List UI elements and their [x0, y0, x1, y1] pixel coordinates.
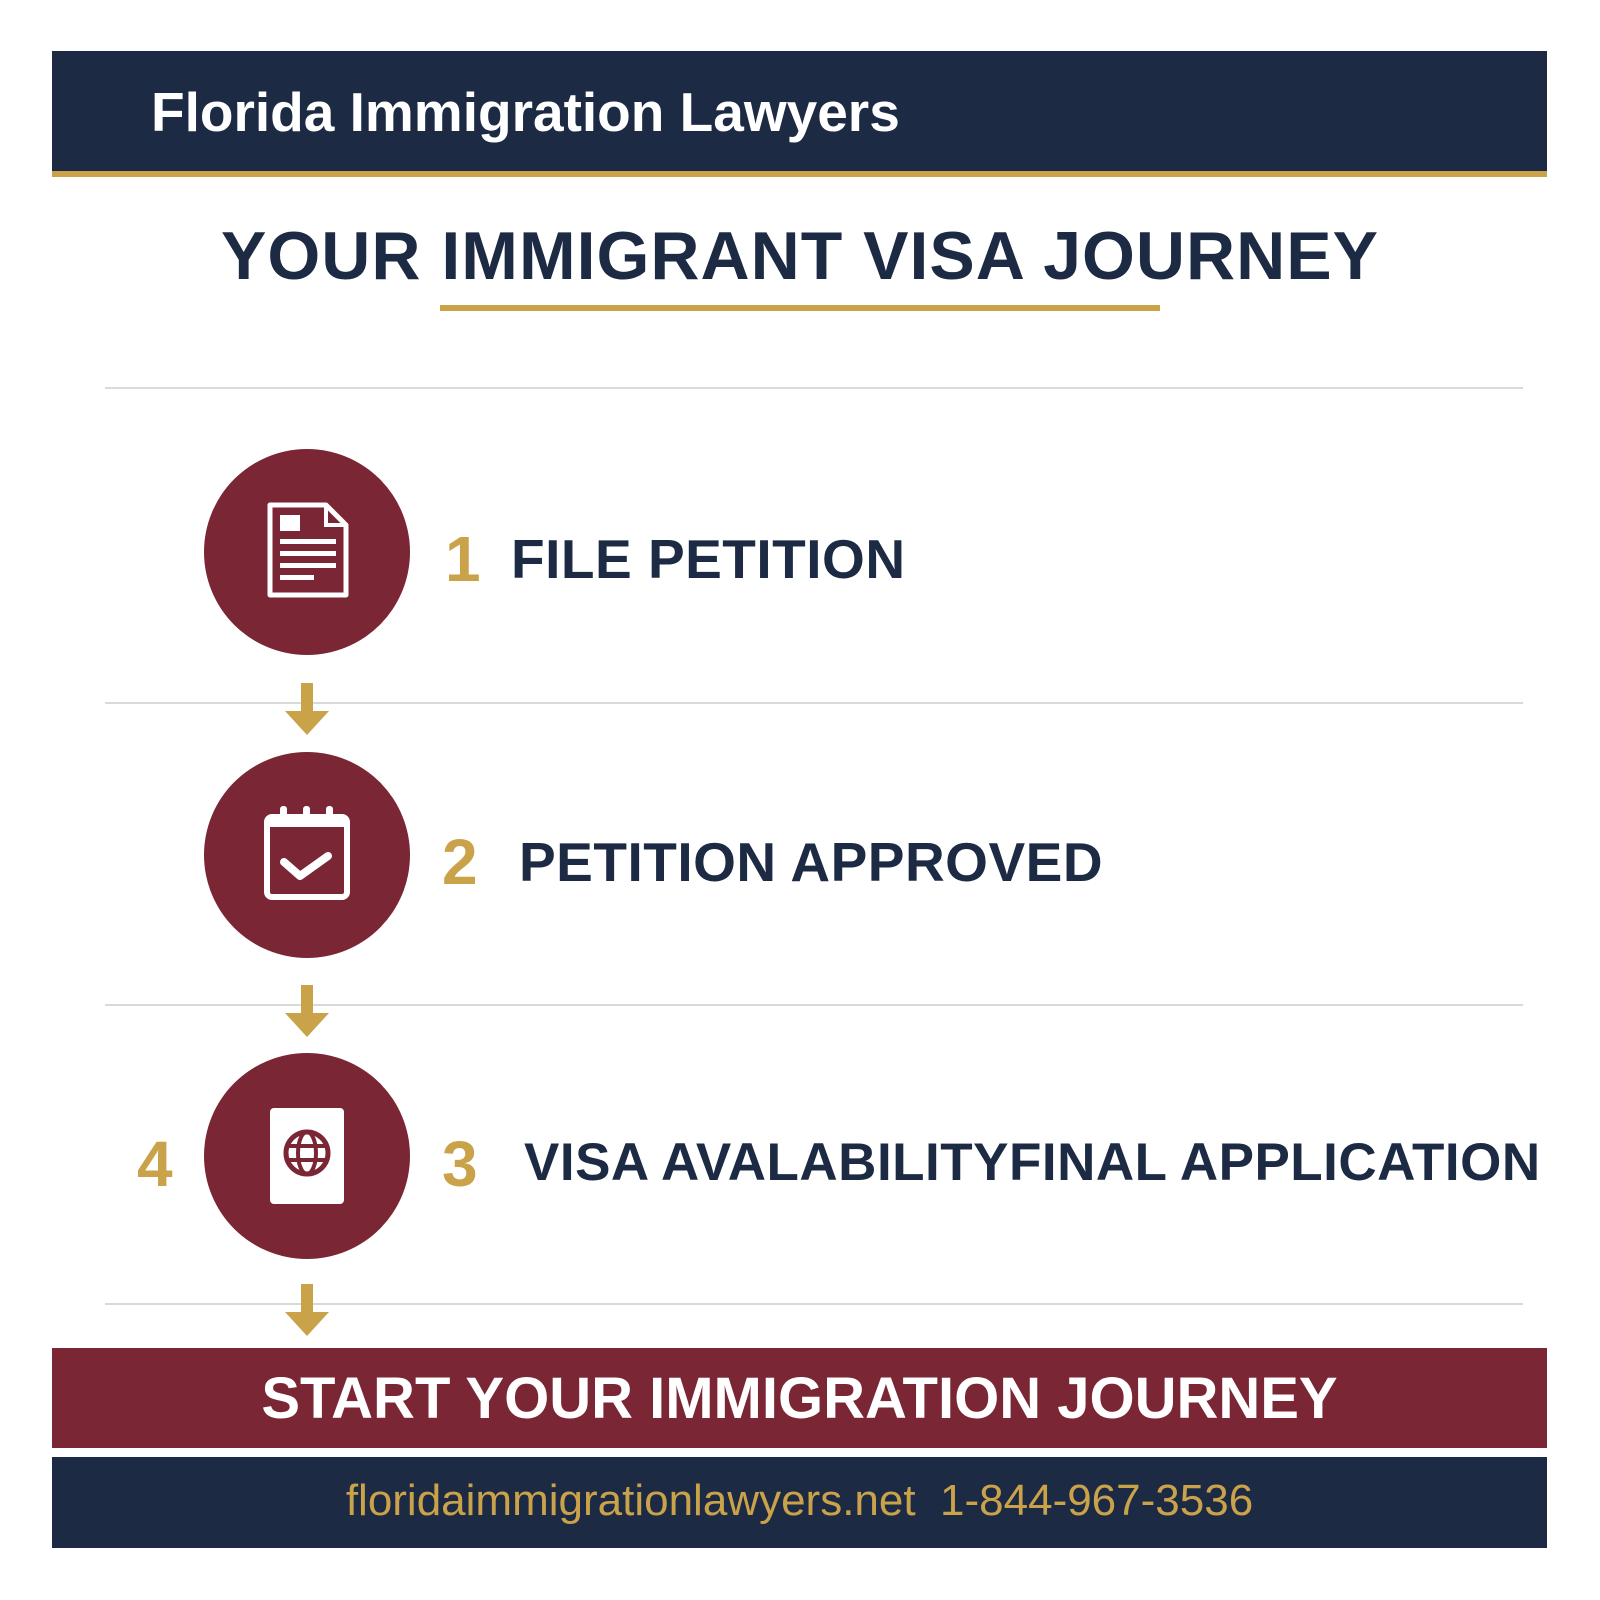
arrow 3 [285, 1284, 329, 1336]
step 1 label: FILE PETITION [511, 528, 906, 590]
arrow 2 [285, 985, 329, 1037]
title underline [440, 305, 1160, 311]
step 1 number: 1 [445, 523, 481, 595]
step 1 circle icon: document [204, 449, 410, 655]
contact info: floridaimmigrationlawyers.net 1-844-967-3536 [346, 1476, 1253, 1525]
cta text: START YOUR IMMIGRATION JOURNEY [261, 1366, 1338, 1431]
step 2 circle icon: calendar check [204, 752, 410, 958]
step 3 label: VISA AVALABILITYFINAL APPLICATION [524, 1133, 1541, 1192]
header bar [52, 51, 1547, 177]
header title: Florida Immigration Lawyers [151, 81, 900, 143]
step 3 number: 3 [442, 1128, 478, 1200]
step 3 circle icon: passport globe [204, 1053, 410, 1259]
main title: YOUR IMMIGRANT VISA JOURNEY [221, 218, 1379, 294]
arrow 1 [285, 683, 329, 735]
step 2 number: 2 [442, 826, 478, 898]
step 2 label: PETITION APPROVED [519, 831, 1103, 893]
step 4 number: 4 [137, 1128, 173, 1200]
footer bar [52, 1457, 1547, 1548]
call to action bar [52, 1348, 1547, 1448]
